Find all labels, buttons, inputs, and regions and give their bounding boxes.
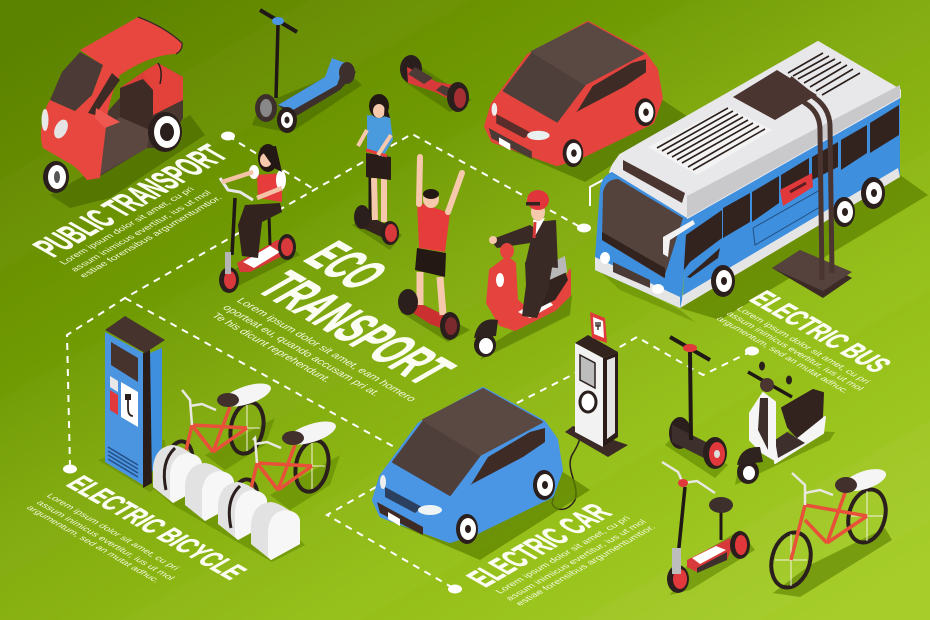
text block: electric car description: assum inimicus evertitur, ius ut mol — [503, 518, 649, 602]
tyres in rack — [164, 448, 240, 528]
pantograph plate — [733, 70, 817, 120]
heading: public transport: PUBLIC TRANSPORT — [24, 139, 237, 262]
tuk-tuk: public transport vehicle — [41, 17, 205, 208]
text block: electric car description — [493, 514, 658, 607]
text block: electric bicycle description: assum inimicus evertitur, ius ut mol — [34, 499, 177, 582]
red electric car — [487, 23, 688, 182]
text block: electric bus description — [714, 305, 873, 395]
rack unit four — [251, 502, 300, 560]
wheels — [43, 112, 182, 193]
bus front — [595, 172, 687, 308]
woman on seated scooter — [219, 144, 300, 293]
text block: electric car description: Lorem ipsum dolor sit amet, cu pri — [493, 514, 632, 595]
parked bicycle one — [159, 379, 275, 495]
woman on self-balancing board — [352, 94, 402, 250]
bus windows — [678, 105, 899, 278]
text block: eco transport description: Te his dicunt reprehendunt. — [208, 311, 334, 384]
rack unit one — [153, 445, 202, 503]
text block: electric bicycle description — [24, 492, 182, 584]
text block: public transport description: estiae forensibus argumentumtior. — [77, 194, 224, 279]
text block: electric bus description: assum inimicus evertitur, ius ut mol — [724, 310, 866, 392]
electric bus — [595, 42, 928, 322]
text block: electric bus description: Lorem ipsum dolor sit amet, cu pri — [734, 305, 873, 385]
blue kick scooter — [252, 10, 362, 133]
dashed connector lines — [63, 132, 759, 594]
rack unit two — [185, 463, 234, 521]
bus roof — [610, 42, 900, 218]
bus charging pole — [772, 78, 852, 298]
red bicycle right — [765, 465, 892, 597]
blue charging kiosk — [98, 316, 170, 492]
white moped — [735, 362, 835, 485]
bus wheels — [711, 177, 885, 297]
bus shadow — [680, 175, 928, 320]
plug icon panel — [121, 382, 138, 427]
heading: electric car: ELECTRIC CAR — [459, 499, 620, 592]
man on red moped — [474, 190, 572, 360]
rack unit three — [218, 482, 267, 540]
charging station — [565, 312, 628, 457]
white bicycle rack — [153, 445, 305, 562]
bus roof vents — [648, 107, 772, 175]
text block: public transport description: Lorem ipsum dolor sit amet, cu pri — [57, 185, 196, 266]
text block: eco transport description: Lorem ipsum dolor sit amet, eam homero — [233, 296, 419, 404]
title: eco transport: ECO — [291, 233, 402, 298]
text block: public transport description — [57, 185, 224, 279]
text block: eco transport description: oporteat eu, quando accusam pri at. — [219, 303, 383, 398]
text block: electric bus description: argumentum, sed an mutat adhuc. — [714, 315, 852, 395]
bus side — [683, 88, 900, 303]
boy on hoverboard — [398, 157, 470, 342]
text block: electric bicycle description: Lorem ipsum dolor sit amet, cu pri — [44, 492, 182, 572]
bus sign — [780, 173, 813, 206]
two-wheel segway — [665, 337, 728, 478]
blue electric car — [375, 389, 590, 560]
text block: electric car description: estiae forensibus argumentumtior. — [513, 523, 658, 607]
title: eco transport — [244, 233, 468, 393]
text block: electric bicycle description: argumentum, sed an mutat adhuc. — [24, 504, 163, 584]
hoverboard top — [400, 55, 472, 112]
seated electric scooter — [662, 462, 755, 595]
title: eco transport: TRANSPORT — [244, 263, 468, 393]
charging cable — [545, 415, 582, 509]
parked bicycle two — [224, 417, 340, 533]
text block: public transport description: assum inimicus evertitur, ius ut mol — [68, 189, 214, 273]
